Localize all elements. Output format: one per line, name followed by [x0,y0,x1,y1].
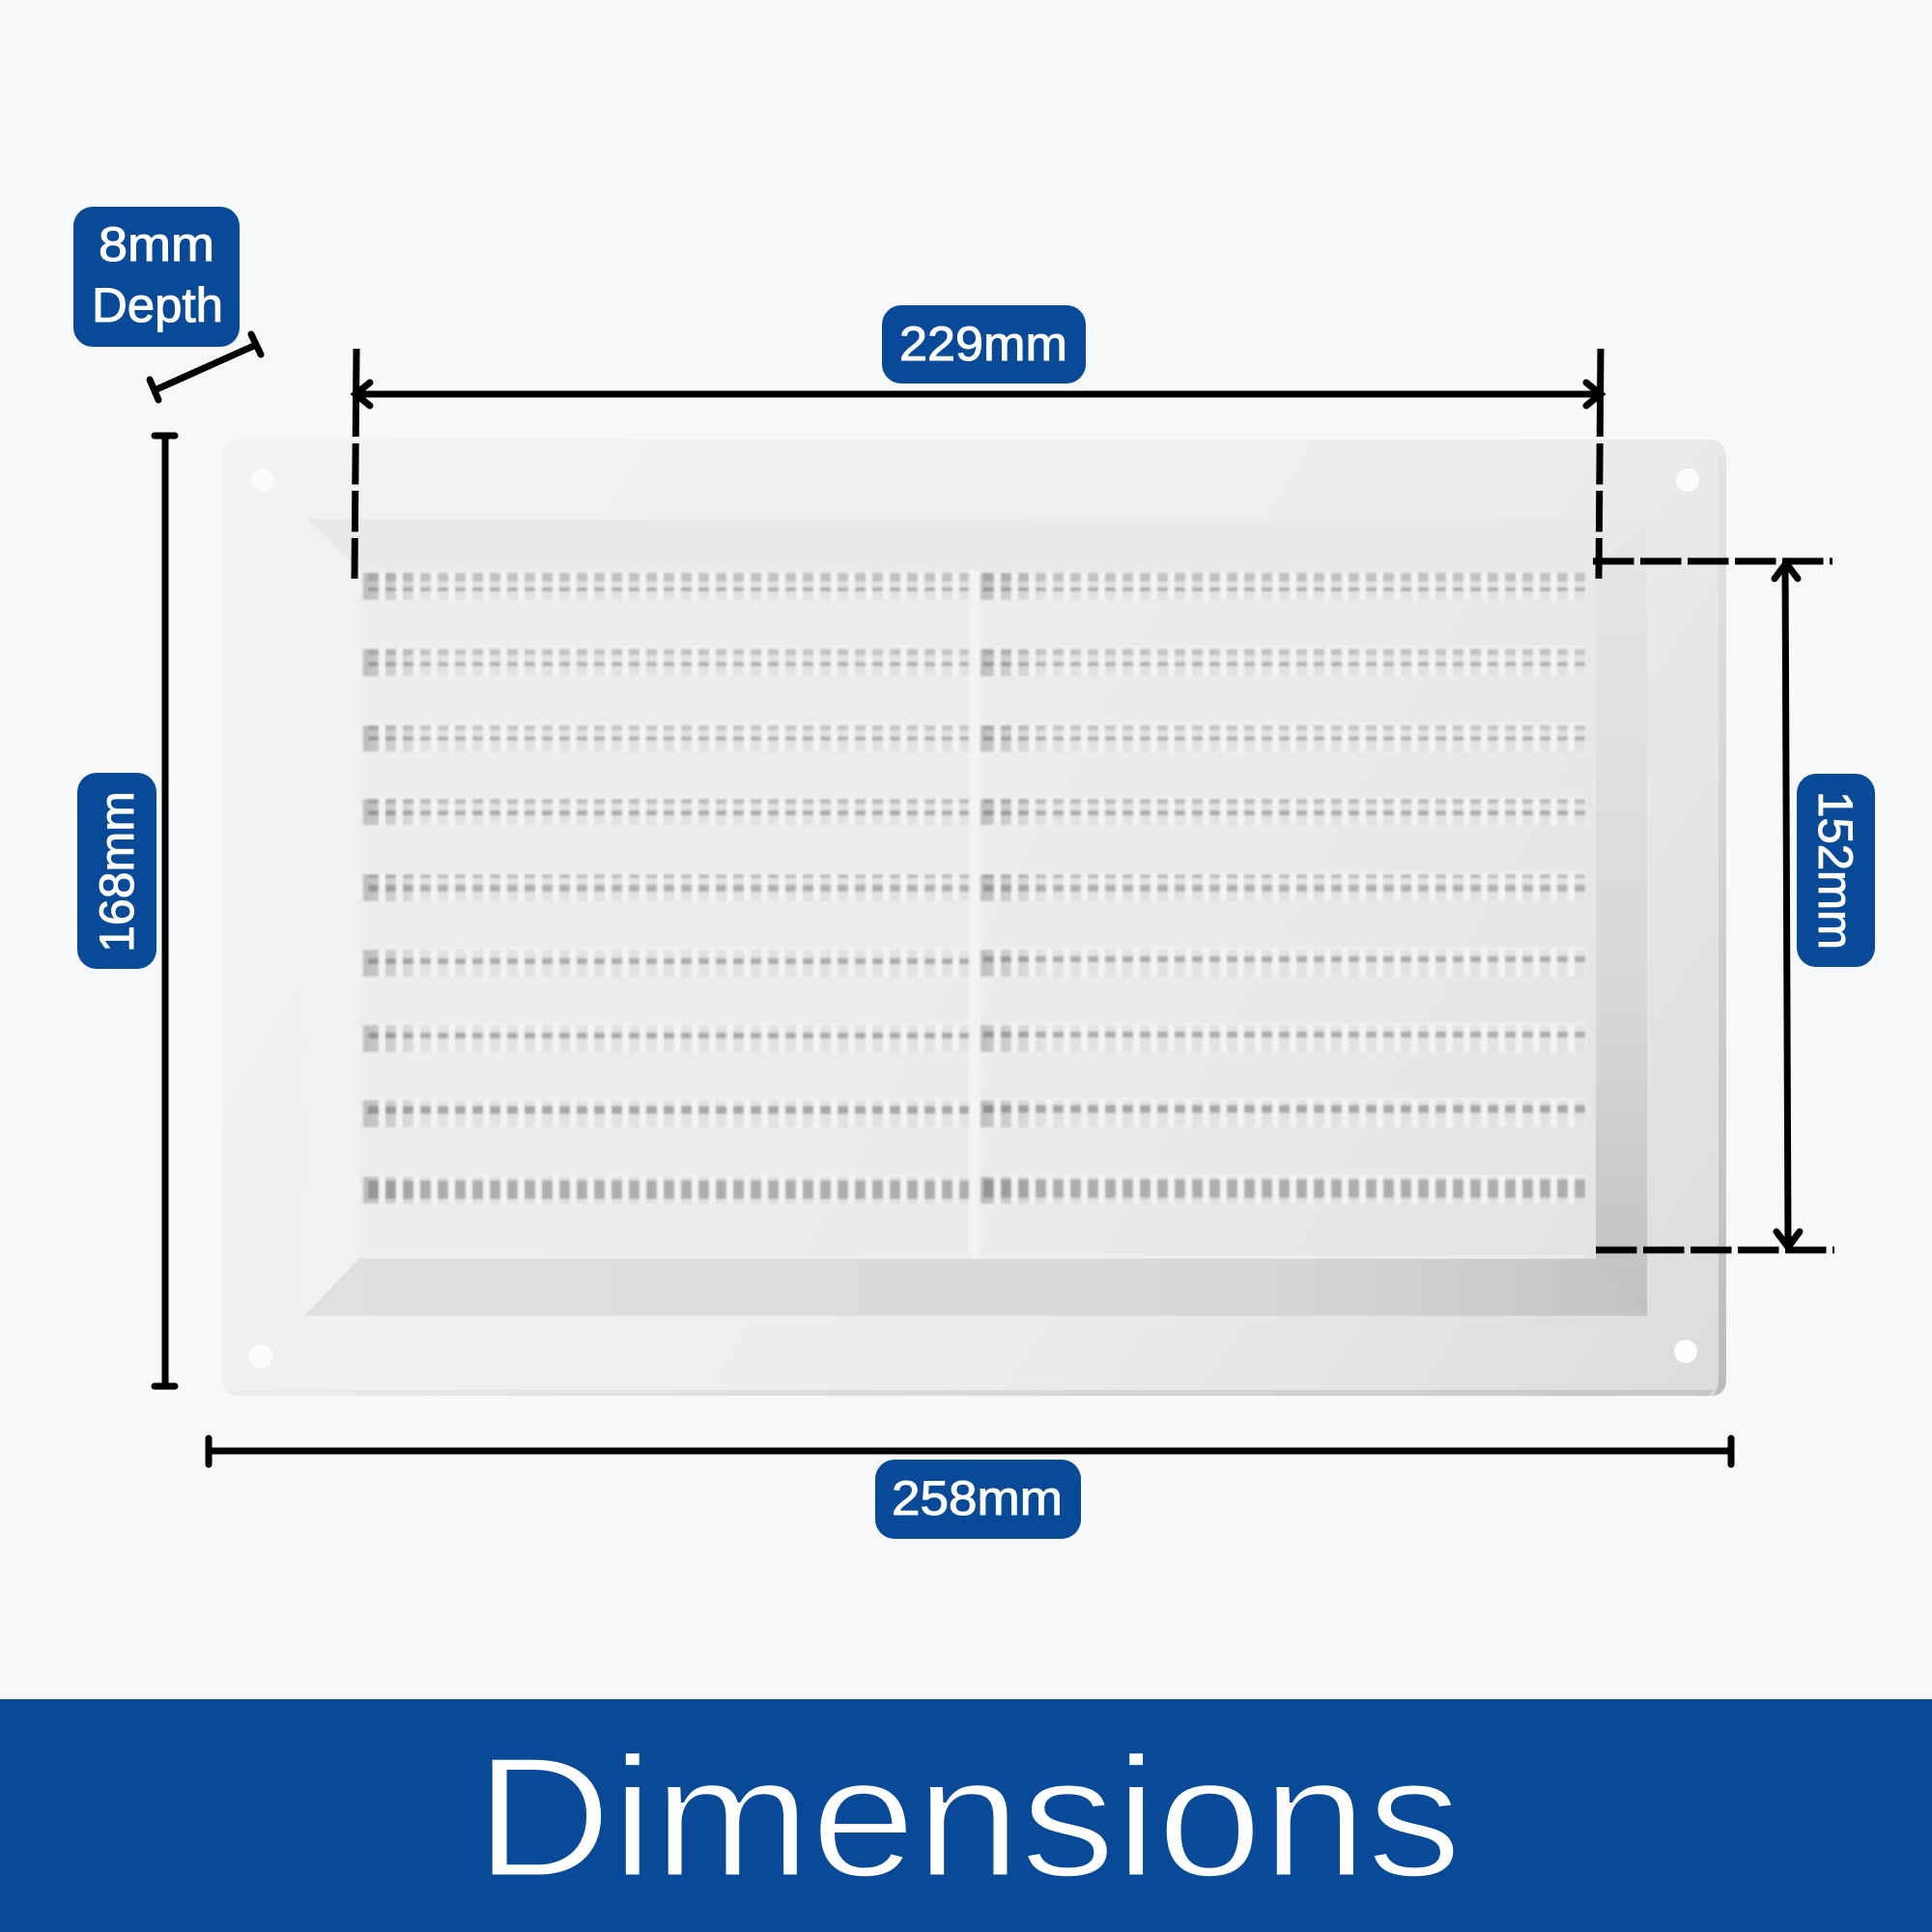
mounting hole bottom right [1674,1340,1697,1363]
badge: 229mm [882,305,1086,384]
row 5 slots [363,874,1586,901]
badge: 8mm depth [73,207,240,347]
badge: 8mm depth: 8mm [99,217,214,271]
upper dashed guide [1593,558,1833,564]
louvre rows [363,570,1586,1259]
152mm arrow [1775,563,1800,1247]
258mm measure [209,1438,1731,1464]
168mm measure [155,436,175,1386]
slat top highlights [363,647,1586,1257]
row 7 slots [363,1025,1586,1052]
229mm arrow [355,383,1601,406]
recess bottom bevel [304,1259,1647,1316]
vent right edge [1710,452,1726,1396]
badge: 168mm: 168mm [90,791,144,952]
central rib [969,570,980,1259]
row 4 slots [363,799,1586,825]
row 1 slots [363,573,1586,600]
badge: 258mm [875,1460,1081,1539]
vent outer frame [222,440,1726,1396]
lower dashed guide [1596,1246,1834,1254]
row 2 slots [363,649,1586,676]
mounting hole top right [1676,469,1699,492]
panel: vent product [222,440,1726,1396]
recess right bevel [1596,519,1647,1316]
vent bottom edge [226,1390,1715,1396]
title: Dimensions [475,1721,1462,1913]
louvre field [359,570,1596,1259]
badge: 152mm [1797,774,1875,967]
badge: 258mm: 258mm [892,1471,1063,1525]
recess top bevel [307,519,1647,570]
recess left bevel [304,519,359,1316]
title band [0,1699,1932,1932]
badge: 168mm [77,773,156,969]
depth measure [150,334,261,400]
mounting hole top left [251,469,274,492]
row 6 slots [363,950,1586,977]
badge: 229mm: 229mm [899,317,1067,371]
right dashed guide [1599,349,1601,579]
row 9 slots [363,1177,1586,1204]
slat left ends [363,599,994,1254]
badge: 8mm depth: Depth [92,278,223,332]
row 3 slots [363,725,1586,752]
mounting hole bottom left [249,1345,272,1368]
badge: 152mm: 152mm [1808,791,1862,950]
left dashed guide [355,349,356,579]
row 8 slots [363,1100,1586,1127]
